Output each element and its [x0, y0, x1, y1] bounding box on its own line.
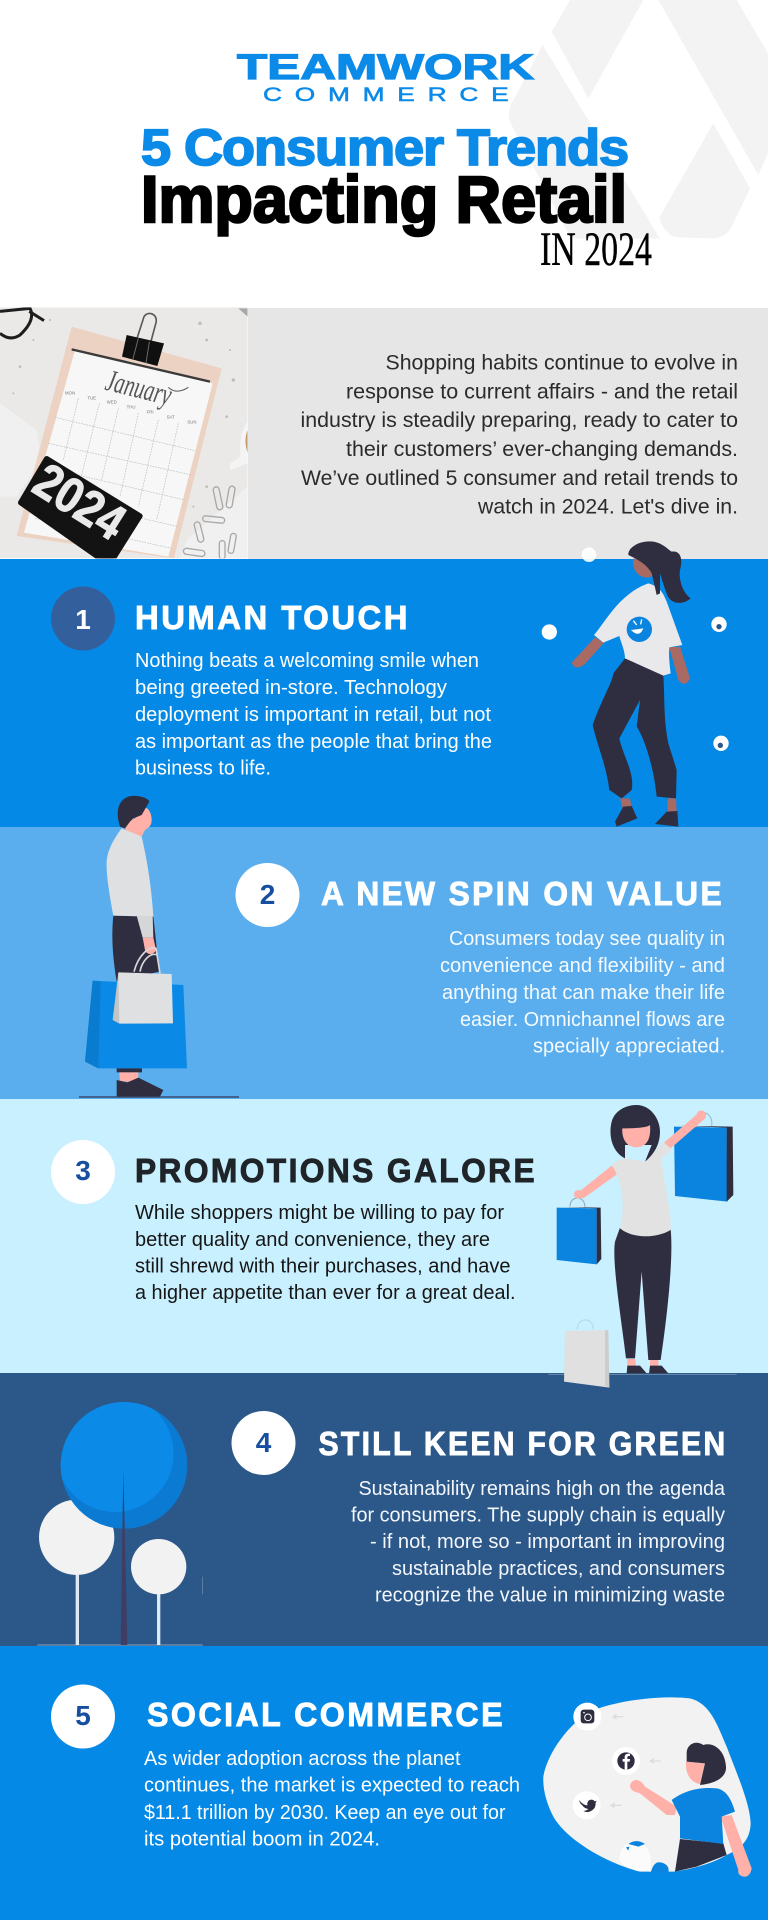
- photo: calendar and 2024 phone: SAT: [167, 414, 175, 419]
- right bag: [674, 1112, 733, 1202]
- body text: being greeted in-store. Technology: [135, 677, 447, 699]
- body text: anything that can make their life: [442, 982, 725, 1004]
- number badge 4: 4: [256, 1427, 272, 1458]
- photo: calendar and 2024 phone: TUE: [87, 395, 96, 400]
- intro text: industry is steadily preparing, ready to cater to: [300, 409, 738, 432]
- glasses: [0, 308, 44, 338]
- body text: - if not, more so - important in improving: [370, 1531, 725, 1553]
- panel: 3 promotions galore: [0, 1099, 768, 1373]
- panel: 1 human touch: [0, 559, 768, 827]
- title: [141, 119, 652, 276]
- intro text: watch in 2024. Let's dive in.: [477, 496, 738, 519]
- body text: [144, 1748, 520, 1851]
- body text: sustainable practices, and consumers: [392, 1558, 725, 1580]
- body text: better quality and convenience, they are: [135, 1229, 490, 1251]
- number badge 4: [232, 1411, 296, 1475]
- photo: calendar and 2024 phone: MON: [65, 390, 75, 395]
- number badge 2: 2: [260, 879, 275, 910]
- body text: Sustainability remains high on the agenda: [358, 1478, 726, 1500]
- body text: a higher appetite than ever for a great deal.: [135, 1282, 516, 1304]
- logo: Teamwork Commerce: COMMERCE: [263, 83, 509, 105]
- binder clip: [137, 313, 156, 345]
- body text: specially appreciated.: [533, 1036, 725, 1058]
- icon: instagram: [573, 1703, 601, 1731]
- body text: deployment is important in retail, but not: [135, 704, 491, 726]
- intro text: their customers’ ever-changing demands.: [346, 438, 738, 461]
- body text: As wider adoption across the planet: [144, 1748, 461, 1770]
- illustration: woman and social media icons: [543, 1697, 752, 1877]
- body text: as important as the people that bring the: [135, 731, 492, 753]
- logo: Teamwork Commerce: TEAMWORK: [237, 48, 534, 87]
- photo: calendar and 2024 phone: SUN: [187, 419, 196, 424]
- icon: twitter: [573, 1791, 601, 1819]
- body text: continues, the market is expected to reach: [144, 1775, 520, 1797]
- body text: still shrewd with their purchases, and have: [135, 1256, 510, 1278]
- shopping bag on floor: [564, 1320, 609, 1388]
- number badge 3: [51, 1140, 115, 1204]
- panel: 4 still keen for green: [0, 1373, 768, 1646]
- body text: Nothing beats a welcoming smile when: [135, 650, 479, 672]
- number badge 1: [51, 586, 115, 650]
- calendar grid: [35, 398, 195, 548]
- heading: human touch: HUMAN TOUCH: [135, 599, 410, 636]
- body text: [135, 650, 492, 780]
- body text: [351, 1478, 726, 1607]
- intro text: [300, 352, 738, 519]
- photo: calendar and 2024 phone: [0, 307, 248, 559]
- body text: easier. Omnichannel flows are: [460, 1009, 725, 1031]
- illustration: man with shopping bags: [79, 796, 239, 1097]
- number badge 1: 1: [75, 604, 91, 635]
- body text: While shoppers might be willing to pay for: [135, 1202, 504, 1224]
- title: Impacting Retail: [141, 162, 627, 236]
- left bag: [557, 1198, 601, 1264]
- heading: social commerce: SOCIAL COMMERCE: [147, 1696, 505, 1733]
- body text: Consumers today see quality in: [449, 928, 725, 950]
- phone with 2024: [21, 459, 140, 558]
- body text: its potential boom in 2024.: [144, 1829, 380, 1851]
- body text: [440, 928, 725, 1058]
- number badge 5: 5: [75, 1700, 91, 1731]
- illustration: woman holding bags: [548, 1105, 737, 1388]
- photo: calendar and 2024 phone: THU: [127, 404, 136, 409]
- illustration: woman with emoji shirt: [542, 541, 729, 827]
- icon: facebook: [612, 1747, 640, 1775]
- photo: calendar and 2024 phone: FRI: [147, 409, 154, 414]
- title: 5 Consumer Trends: [141, 119, 628, 176]
- clipboard: [17, 327, 222, 558]
- number badge 2: [236, 863, 300, 927]
- paper clips: [183, 486, 237, 559]
- panel: intro: [248, 308, 768, 560]
- number badge 5: [51, 1684, 115, 1748]
- body text: for consumers. The supply chain is equally: [351, 1505, 725, 1527]
- body text: convenience and flexibility - and: [440, 955, 725, 977]
- heading: a new spin on value: A NEW SPIN ON VALUE: [321, 875, 724, 912]
- plant: [619, 1841, 669, 1873]
- heading: promotions galore: PROMOTIONS GALORE: [135, 1152, 537, 1189]
- number badge 3: 3: [75, 1155, 91, 1186]
- coffee cup: [230, 422, 248, 470]
- heading: still keen for green: STILL KEEN FOR GREEN: [318, 1425, 728, 1462]
- photo: calendar and 2024 phone: January: [102, 363, 175, 412]
- body text: business to life.: [135, 758, 271, 780]
- logo: Teamwork Commerce: [237, 48, 534, 105]
- body text: $11.1 trillion by 2030. Keep an eye out for: [144, 1802, 506, 1824]
- body text: [135, 1202, 516, 1304]
- photo: calendar and 2024 phone: 2024: [24, 452, 136, 551]
- intro text: response to current affairs - and the retail: [346, 380, 738, 403]
- intro text: We’ve outlined 5 consumer and retail trends to: [301, 467, 738, 490]
- title: IN 2024: [540, 223, 652, 276]
- illustration: trees: [37, 1395, 203, 1645]
- photo: calendar and 2024 phone: WED: [107, 399, 117, 404]
- intro text: Shopping habits continue to evolve in: [386, 352, 738, 375]
- body text: recognize the value in minimizing waste: [375, 1585, 725, 1607]
- panel: 5 social commerce: [0, 1646, 768, 1920]
- watermark logo: [509, 0, 768, 239]
- panel: 2 a new spin on value: [0, 827, 768, 1099]
